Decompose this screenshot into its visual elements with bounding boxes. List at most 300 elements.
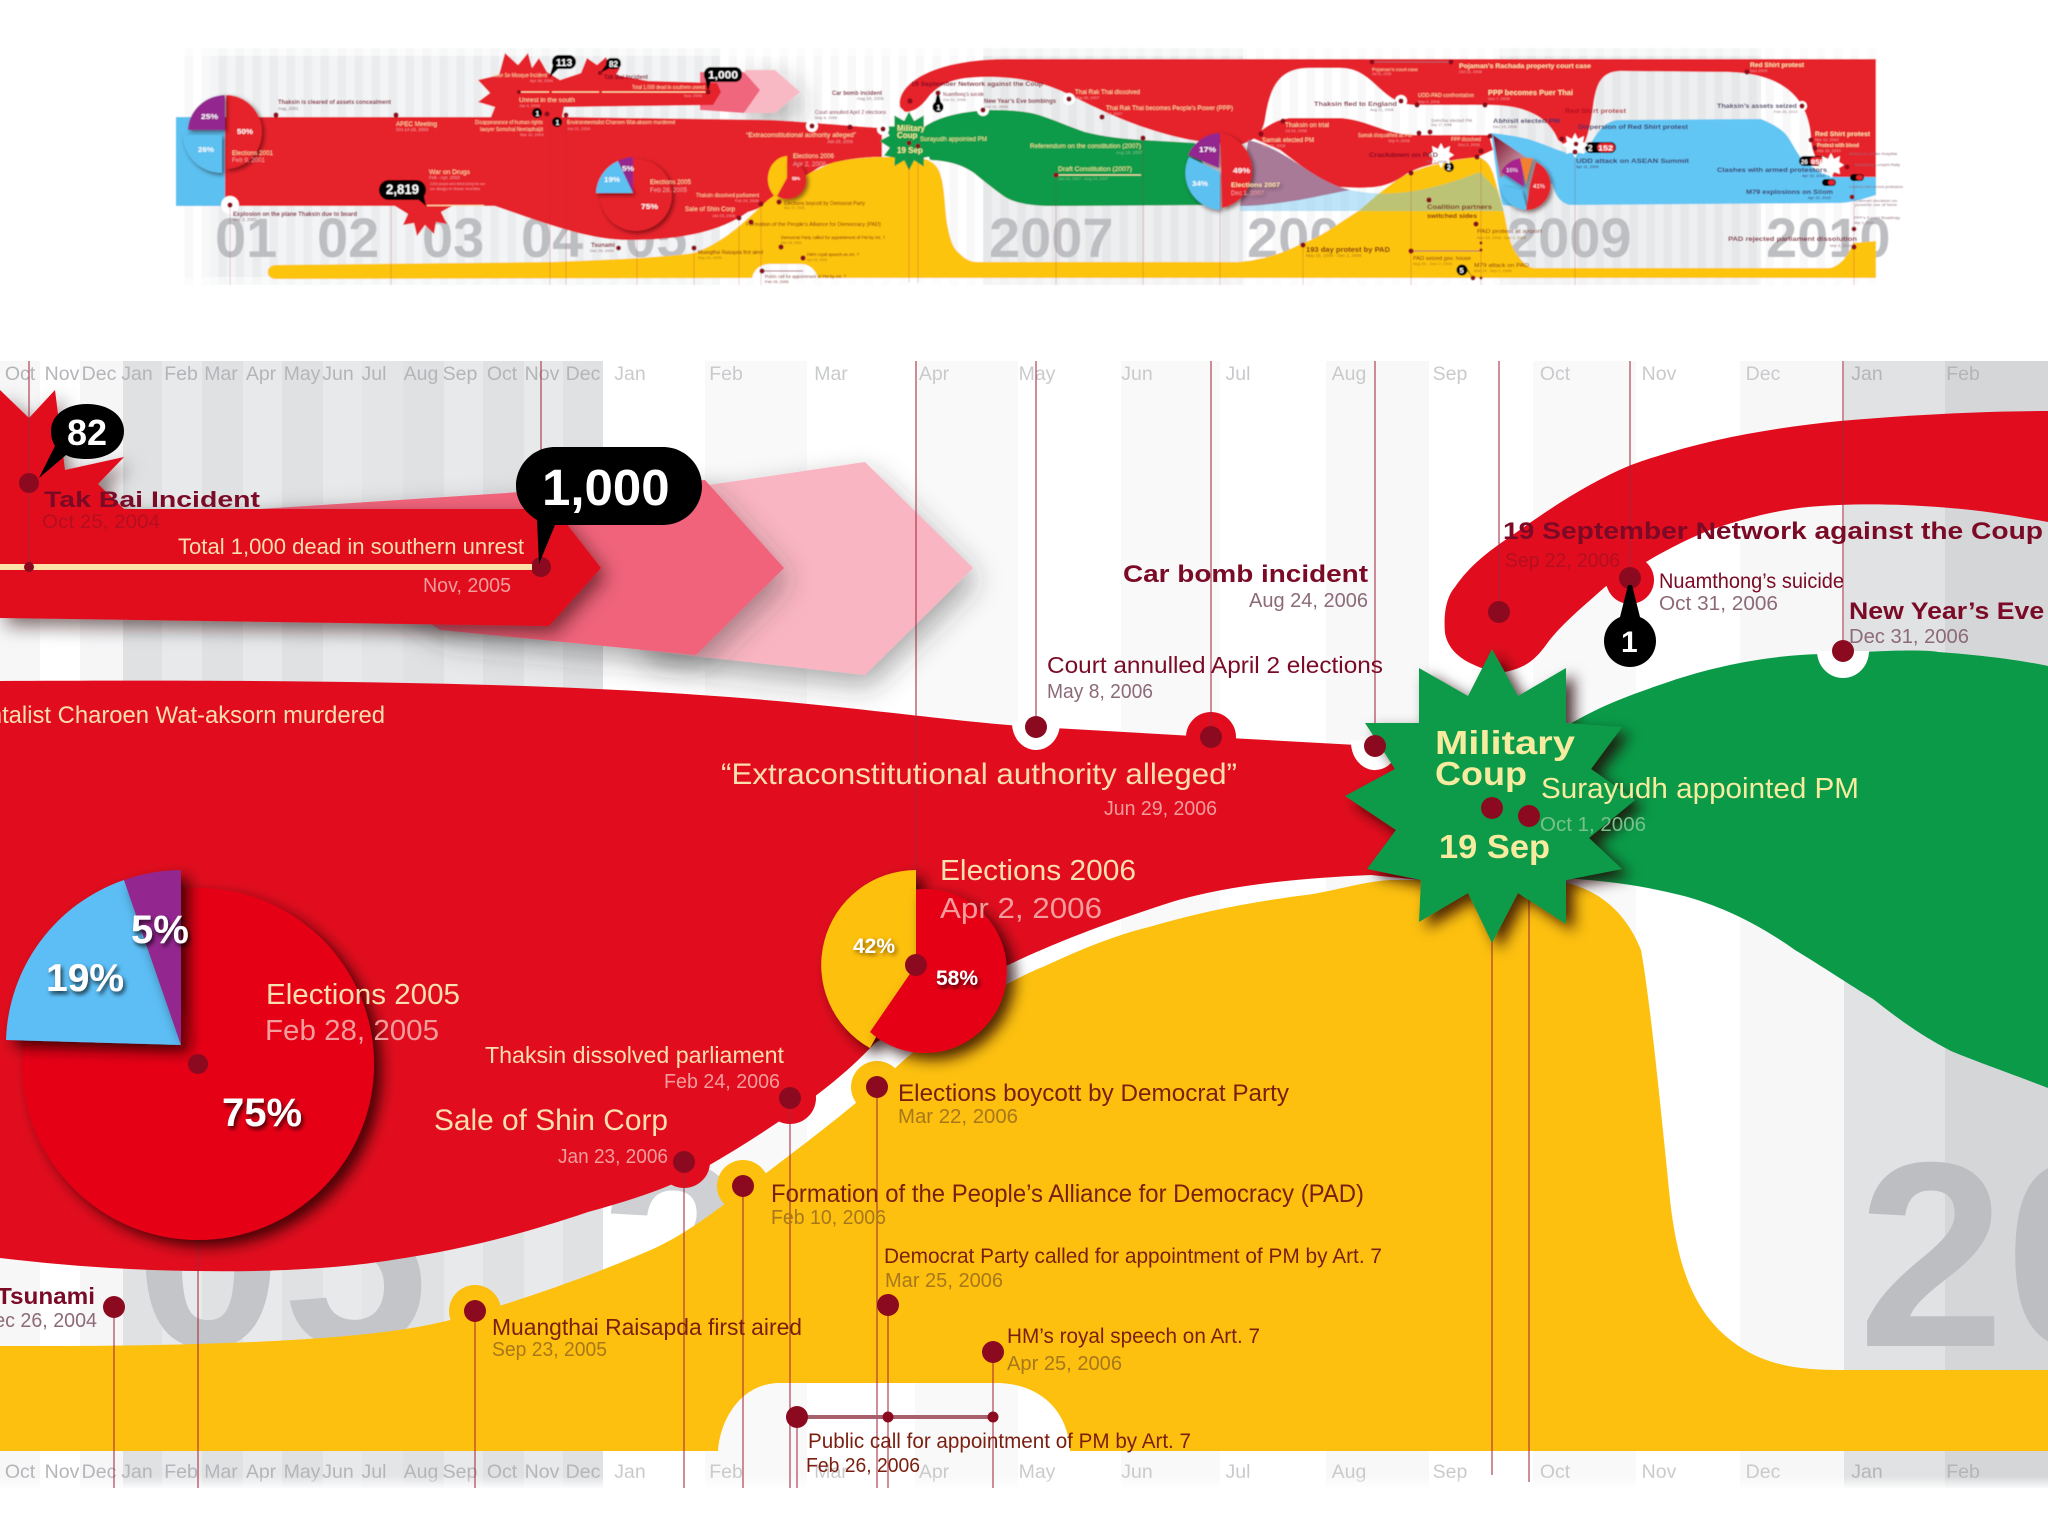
overview pie: elections 2007: Dec 1, 2007	[1231, 191, 1265, 197]
overview event labels: Mar 25, 2006	[781, 241, 802, 245]
overview pie: elections 2006	[768, 153, 834, 199]
overview year numbers: 2010	[1766, 206, 1891, 269]
overview event labels: Tak Bai Incident	[604, 75, 648, 81]
label: Democrat Party call: Democrat Party called for appointment of PM by Art. 7	[884, 1244, 1382, 1268]
overview event labels: Attack on Chula Hospital	[1849, 151, 1897, 156]
overview white notches	[221, 93, 1807, 214]
top month labels: Feb	[164, 363, 198, 385]
overview event labels: Mar 12, 2010	[1815, 137, 1839, 142]
label: New Year's Eve bombings: Dec 31, 2006	[1849, 626, 1969, 648]
overview event labels: switched sides	[1427, 213, 1477, 220]
overview event labels: Surayudh appointed PM	[920, 137, 987, 143]
overview callouts: 1,000	[708, 70, 738, 82]
overview event labels: Krue Se Mosque Incident	[493, 73, 548, 79]
overview guide lines	[230, 118, 1854, 285]
overview callouts: 858	[1811, 160, 1825, 166]
top month labels: Dec	[82, 363, 117, 385]
label: HM's royal speech: Apr 25, 2006	[1007, 1353, 1122, 1375]
overview event labels: PPP dissolved	[1451, 137, 1481, 143]
overview event labels: Protest with blood	[1817, 143, 1859, 149]
overview event labels: Aug 26, - Dec 2, 2008	[1413, 261, 1453, 266]
label: elections 2006	[940, 855, 1136, 925]
detail timeline panel	[0, 361, 2048, 1490]
overview event labels: Thai Rak Thai dissolved	[1075, 89, 1140, 96]
top month labels: Apr	[919, 363, 950, 385]
bottom month labels: Nov	[1642, 1461, 1677, 1483]
overview second red stream	[1250, 118, 1493, 188]
label: elections 2005: Feb 28, 2005	[265, 1015, 439, 1047]
overview event labels: Military	[897, 124, 926, 133]
label: Sale of Shin Corp	[434, 1104, 668, 1168]
label: Sale of Shin Corp: Sale of Shin Corp	[434, 1104, 668, 1137]
top month labels: Nov	[525, 363, 560, 385]
label: Formation of PAD: Feb 10, 2006	[771, 1207, 886, 1229]
overview pie: elections 2007: Elections 2007	[1231, 182, 1280, 189]
upper red anti-coup stream	[1445, 411, 2048, 672]
callout: 1 death	[1604, 585, 1656, 667]
top month labels: Jun	[1121, 363, 1153, 385]
overview event labels: UDD attack on ASEAN Summit	[1576, 158, 1690, 165]
overview event labels: Saladaeng Lumpini Rally	[1854, 162, 1900, 167]
overview event labels: Explosion on the plane Thaksin due to board	[233, 211, 357, 218]
overview mauve transition	[1240, 140, 1350, 206]
overview event labels: Draft Constitution (2007)	[1058, 166, 1132, 173]
overview event labels: Apr 11, 2009	[1576, 164, 1599, 169]
top month labels: Dec	[1746, 363, 1781, 385]
overview callouts: 1	[936, 105, 940, 112]
callout: 1,000 dead	[516, 447, 702, 564]
overview event labels: Abhisit elected PM	[1493, 118, 1560, 125]
overview event labels: May 8, 2006	[815, 115, 838, 120]
military coup starburst: Military	[1435, 724, 1576, 761]
label: 19 September Network	[1503, 518, 2043, 572]
overview event labels: Democrat Party called for appointment of PM by Art. 7	[781, 235, 885, 240]
top month labels: Apr	[246, 363, 277, 385]
label: Car bomb incident	[1123, 561, 1368, 612]
overview pie: elections 2007: 34%	[1192, 179, 1208, 188]
overview pie: elections 2001	[183, 95, 273, 173]
bottom month labels: Oct	[1540, 1461, 1571, 1483]
overview callouts: 113	[556, 58, 573, 69]
top month labels: Dec	[566, 363, 601, 385]
vertical guide lines	[29, 361, 1843, 1488]
overview event labels: Dec 2009	[1750, 68, 1768, 73]
top month labels: Nov	[45, 363, 80, 385]
overview event labels: Sale of Shin Corp	[685, 206, 735, 213]
top month labels: Mar	[204, 363, 238, 385]
overview event labels: Thai Rak Thai becomes People’s Power (PPP)	[1106, 105, 1233, 112]
overview event labels: Dec 2, 2008	[1458, 142, 1480, 147]
overview event labels: Feb 26, 2006	[765, 279, 789, 284]
overview event labels: Sep 9, 2008	[1388, 138, 1410, 143]
overview callouts: 2	[1588, 144, 1593, 153]
overview blue opposition block	[176, 117, 226, 206]
bottom month labels: Nov	[45, 1461, 80, 1483]
bottom month labels: Jan	[614, 1461, 646, 1483]
pie chart: elections 2005	[6, 870, 374, 1240]
overview white starbursts	[1428, 133, 1844, 178]
overview event labels: Mar 3, 2010	[1830, 243, 1852, 248]
overview pie: elections 2001: Elections 2001	[232, 150, 273, 157]
overview event labels: Apr 22, 2010	[1808, 195, 1832, 200]
overview pie: elections 2005: 5%	[622, 164, 634, 173]
overview dark wedge	[1493, 135, 1530, 178]
label: Thaksin dissolved parliament	[485, 1042, 784, 1093]
overview event labels: Coup	[897, 131, 918, 140]
bottom month labels: Apr	[919, 1461, 950, 1483]
label: Formation of PAD: Formation of the People’s Alliance for Democracy (PAD)	[771, 1180, 1364, 1208]
label: Elections boycott	[898, 1080, 1289, 1128]
overview event labels: Feb - Apr, 2003	[429, 175, 460, 180]
overview event labels: Thaksin on trial	[1285, 122, 1330, 129]
overview pie: elections 2001: 26%	[198, 145, 214, 154]
overview event labels: Car bomb incident	[832, 90, 883, 97]
overview event labels: Nuamthong’s suicide	[943, 92, 984, 98]
overview event labels: Jan 23, 2006	[712, 213, 736, 218]
overview event labels: New Year’s Eve bombings	[984, 98, 1056, 105]
military coup starburst	[1345, 649, 1635, 943]
overview pie: elections 2006: Elections 2006	[793, 153, 834, 160]
top month labels: Jun	[322, 363, 354, 385]
overview callouts: 82	[609, 60, 618, 69]
bottom month labels: Jun	[322, 1461, 354, 1483]
overview year numbers: 2009	[1507, 206, 1632, 269]
overview event labels: Apr 25, 2006	[807, 258, 827, 262]
overview event labels: Aug, 2001	[278, 106, 299, 111]
label: Thaksin dissolved parliament: Thaksin dissolved parliament	[485, 1042, 784, 1068]
month background bands	[0, 361, 2048, 1488]
top month labels: Oct	[1540, 363, 1571, 385]
label: elections 2005	[265, 979, 460, 1047]
overview blue transition over yellow	[1240, 172, 1504, 211]
overview pie: elections 2007	[1185, 133, 1280, 210]
cream range line	[0, 562, 532, 572]
overview event labels: Thaksin fled to England	[1314, 101, 1397, 108]
overview event labels: HM’s royal speech on Art. 7	[807, 252, 859, 257]
year numbers: 2006	[600, 1107, 1187, 1402]
overview event labels: Feb 26, 2010	[1774, 109, 1798, 114]
overview event labels: Dec 31, 2006	[984, 104, 1009, 109]
overview callouts: 5	[1460, 266, 1464, 275]
callout: 82 dead	[39, 404, 124, 478]
overview red stream	[225, 53, 882, 240]
overview pie: elections 2005: Feb 28, 2005	[650, 188, 688, 194]
overview event labels: PAD protest at airport	[1477, 229, 1543, 235]
bottom month labels: Jul	[1226, 1461, 1250, 1483]
label: elections 2006: Elections 2006	[940, 855, 1136, 887]
label: Surayudh appointed PM: Surayudh appointed PM	[1541, 773, 1859, 805]
overview event labels: Oct 21, 2008	[1459, 69, 1483, 74]
bottom month labels: May	[284, 1461, 321, 1483]
label: Car bomb incident: Aug 24, 2006	[1249, 590, 1368, 612]
overview event labels: PPP’s 5 point Roadmap	[1854, 215, 1901, 220]
label: extraconstitutional authority	[721, 758, 1237, 820]
label: public call	[806, 1429, 1191, 1477]
overview purple range lines	[762, 62, 1481, 271]
overview event labels: Mar 12, 2004	[520, 132, 544, 137]
overview event labels: Nov 25, 2008 - Dec 2, 2008	[1477, 235, 1527, 240]
label: HM's royal speech	[1007, 1324, 1260, 1375]
label: Court annulled elections: Court annulled April 2 elections	[1047, 652, 1383, 678]
overview event labels: Mar 3, 2001	[233, 217, 258, 222]
label: public call: Public call for appointment of PM by Art. 7	[808, 1429, 1191, 1453]
label: Tak Bai Incident: Oct 25, 2004	[42, 512, 160, 533]
label: total dead in southern unrest: Total 1,000 dead in southern unrest	[178, 534, 525, 559]
overview event labels: Jul 31, 2008	[1372, 72, 1391, 76]
callout: 1 death: 1	[1621, 626, 1638, 659]
overview pie: elections 2005: 75%	[641, 202, 658, 211]
overview event labels: Mar 19 - Sep 1, 2008	[1474, 268, 1512, 273]
overview callouts: 152	[1598, 146, 1613, 152]
bottom month labels: Jun	[1121, 1461, 1153, 1483]
bottom month labels: Aug	[1332, 1461, 1366, 1483]
military coup starburst: Coup	[1435, 755, 1527, 792]
top month labels: Sep	[443, 363, 477, 385]
top month labels: Feb	[1946, 363, 1980, 385]
overview event labels: Environmentalist Charoen Wat-aksorn murdered	[567, 120, 675, 126]
overview callouts	[379, 55, 1864, 278]
overview event labels: Oct 31, 2006	[943, 97, 967, 102]
overview event labels: May 30, 2007	[1075, 95, 1100, 100]
bottom month labels: Nov	[525, 1461, 560, 1483]
overview pie: elections 2001: 25%	[201, 112, 218, 121]
overview event labels: Coalition partners	[1427, 204, 1492, 211]
top month labels: Aug	[1332, 363, 1366, 385]
top month labels: Jan	[614, 363, 646, 385]
bottom month labels: Feb	[164, 1461, 198, 1483]
overview callouts: 2,819	[386, 182, 419, 197]
bottom month labels: Oct	[5, 1461, 36, 1483]
overview year numbers: 01	[215, 206, 277, 269]
bottom month labels: Jul	[362, 1461, 386, 1483]
overview pie: elections 2007: 17%	[1199, 145, 1216, 154]
overview event labels: Mar 16, 2010	[1817, 148, 1841, 153]
overview event labels: Oct 7, 2008	[1426, 159, 1447, 164]
public call range line	[786, 1406, 998, 1428]
overview event labels: Jan 4, 2004	[519, 103, 541, 108]
overview event labels: Jul, 2007	[1106, 111, 1123, 116]
bottom month labels: Sep	[443, 1461, 477, 1483]
overview event labels: Jan 29, 2008	[1262, 143, 1286, 148]
top month labels: Oct	[5, 363, 36, 385]
label: Nuamthong's suicide: Oct 31, 2006	[1659, 593, 1778, 615]
pie chart: elections 2006: 42%	[853, 935, 895, 958]
overview event labels: APEC Meeting	[396, 121, 437, 128]
bottom month labels: Dec	[566, 1461, 601, 1483]
top month labels: Jan	[121, 363, 153, 385]
label: 19 September Network: Sep 22, 2006	[1505, 550, 1620, 572]
overview event labels: War on Drugs	[429, 169, 471, 176]
pie chart: elections 2005: 75%	[222, 1091, 302, 1135]
overview event labels: Samak disqualified as PM	[1358, 133, 1412, 139]
overview event labels: Court annulled April 2 elections	[815, 110, 886, 116]
overview event labels: Red Shirt protest	[1565, 108, 1627, 115]
overview pie: elections 2005: 19%	[604, 175, 620, 184]
label: total dead in southern unrest: Nov, 2005	[423, 575, 511, 597]
overview event labels: Tsunami	[591, 243, 615, 249]
overview event labels: Dispersion of Red Shirt protest	[1578, 124, 1689, 131]
overview event labels: Elections boycott by Democrat Party	[784, 201, 865, 207]
pie chart: elections 2005: 19%	[46, 957, 124, 1000]
callout: 82 dead: 82	[67, 412, 107, 453]
overview cream range lines	[427, 92, 1141, 206]
overview event labels: Aug 11, 2008	[1370, 107, 1394, 112]
overview pie: elections 2001: Feb 9, 2001	[232, 158, 266, 164]
label: Formation of PAD	[771, 1180, 1364, 1229]
overview event labels: Muangthai Raisapda first aired	[698, 250, 763, 256]
overview event labels: Total 1,000 dead in southern unrest	[632, 85, 706, 91]
overview event labels: Pojaman’s court case	[1372, 67, 1419, 72]
overview pie: elections 2007: 49%	[1233, 166, 1250, 175]
label: HM's royal speech: HM’s royal speech on Art. 7	[1007, 1324, 1260, 1348]
overview event labels: Red Shirt protest	[1815, 132, 1870, 138]
overview pie: elections 2005: Elections 2005	[650, 179, 691, 186]
label: Muangthai Raisapda: Muangthai Raisapda first aired	[492, 1314, 802, 1340]
label: Sale of Shin Corp: Jan 23, 2006	[558, 1146, 668, 1168]
red main stream	[0, 681, 1430, 1271]
label: Muangthai Raisapda	[492, 1314, 802, 1361]
top month labels: Mar	[814, 363, 848, 385]
label: New Year's Eve bombings	[1849, 598, 2048, 648]
label: Tak Bai Incident: Tak Bai Incident	[44, 487, 261, 512]
overview event labels: Formation of the People’s Alliance for Democracy (PAD)	[746, 222, 881, 228]
bottom month labels: Mar	[814, 1461, 848, 1483]
overview event dots	[227, 60, 1857, 280]
event dots	[19, 473, 1854, 1363]
overview event labels: Mar 22, 2006	[784, 206, 805, 210]
overview timeline strip	[176, 48, 1903, 285]
label: Nuamthong's suicide	[1659, 570, 1844, 615]
overview fading arrows	[700, 70, 800, 113]
overview event labels: Pojaman’s Rachada property court case	[1459, 64, 1592, 70]
label: Democrat Party call: Mar 25, 2006	[885, 1270, 1003, 1292]
green military stream	[1560, 650, 2048, 1088]
bottom month labels: Dec	[82, 1461, 117, 1483]
overview event labels: Nov, 2005	[684, 93, 703, 98]
label: 19 September Network: 19 September Network against the Coup	[1503, 518, 2043, 545]
overview event labels: PAD rejected parliament dissolution	[1728, 236, 1857, 243]
overview event labels: Clashes with armed protestors	[1717, 167, 1827, 174]
label: Elections boycott: Elections boycott by Democrat Party	[898, 1080, 1289, 1107]
bottom month labels: Apr	[246, 1461, 277, 1483]
overview event labels: lawyer Somchai Neelaphaijit	[480, 127, 543, 133]
overview callouts: 1	[556, 120, 560, 127]
overview event labels: Jan 24, 2007 - Aug 19, 2007	[1058, 176, 1109, 181]
overview pie: 2008 parliament: 16%	[1506, 168, 1518, 174]
bottom month labels: Dec	[1746, 1461, 1781, 1483]
overview event labels: Jun 29, 2006	[827, 139, 854, 144]
top month labels: Oct	[487, 363, 518, 385]
overview year numbers: 05	[625, 206, 687, 269]
year numbers: 05	[135, 1107, 429, 1402]
overview event labels: Samak elected PM	[1262, 137, 1314, 144]
bottom month labels: Jan	[121, 1461, 153, 1483]
bottom month labels: May	[1019, 1461, 1056, 1483]
overview pie: 2008 parliament	[1501, 158, 1551, 210]
overview event labels: Feb 24, 2006	[735, 198, 759, 203]
overview year numbers	[215, 206, 1891, 269]
overview pie: elections 2001: 50%	[237, 127, 253, 136]
top month labels: Feb	[709, 363, 743, 385]
label: extraconstitutional authority: “Extraconstitutional authority alleged”	[721, 758, 1237, 791]
label: total dead in southern unrest	[178, 534, 525, 597]
top month labels: May	[284, 363, 321, 385]
overview event labels: Oct 14-15, 2003	[396, 127, 429, 132]
overview event labels: UDD-PAD confrontation	[1418, 93, 1474, 99]
top month labels: Nov	[1642, 363, 1677, 385]
bottom month labels: Feb	[1946, 1461, 1980, 1483]
overview event labels: Dec 26, 2004	[590, 248, 615, 253]
callout: 1,000 dead: 1,000	[542, 459, 670, 516]
bottom month labels	[5, 1461, 1980, 1483]
overview event labels: Cabinet decision on	[1855, 198, 1897, 203]
label: Nuamthong's suicide: Nuamthong’s suicide	[1659, 570, 1844, 593]
pie chart: elections 2006: 58%	[936, 967, 978, 990]
overview event labels: Thaksin dissolved parliament	[696, 193, 760, 199]
overview event labels: Aug 19, 2007	[1116, 150, 1143, 155]
overview event labels: PAD seized gov. house	[1413, 256, 1471, 262]
overview event labels: PPP becomes Puer Thai	[1488, 90, 1573, 97]
bottom month labels: Jan	[1851, 1461, 1883, 1483]
top month labels	[5, 363, 1980, 385]
overview event labels: 19 September Network against the Coup	[911, 81, 1043, 88]
overview yellow stream	[268, 157, 1876, 279]
label: Court annulled elections: May 8, 2006	[1047, 681, 1153, 703]
label: elections 2005: Elections 2005	[266, 979, 460, 1011]
overview pie: 2008 parliament: 41%	[1533, 184, 1545, 190]
overview war on drugs starburst	[395, 206, 452, 236]
event bumps	[449, 556, 1869, 1337]
overview upper red stream	[900, 59, 1876, 180]
overview year numbers: 04	[521, 206, 583, 269]
top month labels: Jul	[1226, 363, 1250, 385]
label: Car bomb incident: Car bomb incident	[1123, 561, 1368, 588]
overview event labels: Sep 23, 2005	[698, 255, 723, 260]
top month labels: Sep	[1433, 363, 1467, 385]
label: Tsunami	[0, 1283, 97, 1332]
overview event labels: Disappearance of human rights	[475, 120, 543, 126]
overview pie: elections 2006: 58%	[792, 176, 800, 181]
overview event labels: Unrest in the south	[519, 97, 575, 104]
overview pie: elections 2005	[596, 157, 691, 231]
overview event labels: Dec 15, 2008	[1493, 124, 1518, 129]
overview event labels: Aug 24, 2006	[857, 96, 884, 101]
pie chart: elections 2005: 5%	[131, 908, 189, 952]
red unrest band with starburst	[0, 390, 601, 626]
top month labels: Jul	[362, 363, 386, 385]
overview event labels: Referendum on the constitution (2007)	[1030, 143, 1141, 150]
overview blue stream	[1491, 119, 1876, 208]
yellow PAD stream	[0, 880, 2048, 1451]
overview event labels: May 25, 2008 - Dec 2, 2008	[1306, 253, 1362, 258]
overview event labels: 2,819 people were killed during the war	[430, 182, 486, 186]
military coup starburst: 19 Sep	[1439, 828, 1550, 865]
overview event labels: May 3, 2010	[1854, 221, 1873, 225]
overview event labels: 19 Sep	[897, 146, 923, 155]
label: Surayudh appointed PM	[1540, 773, 1859, 836]
pie chart: elections 2006	[821, 870, 1007, 1053]
overview event labels: Sep 2, 2008	[1418, 99, 1440, 104]
bottom month labels: Feb	[709, 1461, 743, 1483]
bottom month labels: Mar	[204, 1461, 238, 1483]
overview year numbers: 03	[422, 206, 484, 269]
overview event labels: M79 attack on PAD	[1474, 263, 1529, 269]
bottom month labels: Sep	[1433, 1461, 1467, 1483]
overview event labels: Jun 21, 2004	[567, 126, 591, 131]
overview event labels: Thaksin’s assets seized	[1717, 103, 1797, 110]
overview event labels: Red Shirt protest	[1750, 63, 1804, 69]
overview event labels: Thaksin is cleared of assets concealment	[278, 99, 392, 106]
